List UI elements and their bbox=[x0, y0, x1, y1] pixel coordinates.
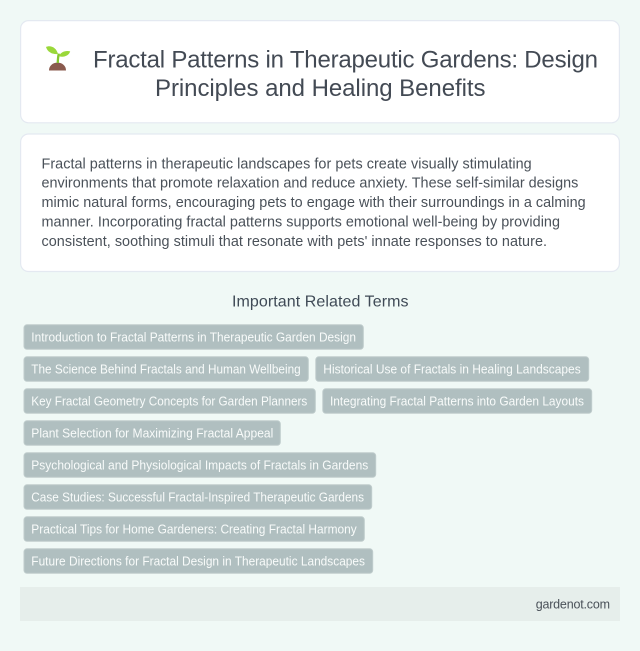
tag: case studies bbox=[24, 485, 372, 509]
text block: description: consistent, soothing stimuli that resonate with pets' innate responses to nature. bbox=[42, 234, 547, 250]
tag: plant selection bbox=[24, 421, 280, 445]
title: Fractal Patterns in Therapeutic Gardens: Design bbox=[93, 46, 598, 73]
footer bbox=[20, 587, 620, 621]
tag: case studies: Case Studies: Successful Fractal-Inspired Therapeutic Gardens bbox=[31, 489, 364, 504]
text block: description: mimic natural forms, encouraging pets to engage with their surroundings in a calming bbox=[42, 195, 586, 211]
tag: science bbox=[24, 357, 308, 381]
title: Principles and Healing Benefits bbox=[155, 75, 486, 102]
tag: plant selection: Plant Selection for Maximizing Fractal Appeal bbox=[31, 425, 273, 440]
tag: integrating patterns bbox=[323, 389, 592, 413]
tag: integrating patterns: Integrating Fractal Patterns into Garden Layouts bbox=[330, 393, 584, 408]
tag: impacts: Psychological and Physiological Impacts of Fractals in Gardens bbox=[31, 457, 369, 472]
panel: title card bbox=[21, 21, 619, 123]
tag: geometry concepts bbox=[24, 389, 315, 413]
icon: seedling bbox=[46, 46, 70, 70]
tag: science: The Science Behind Fractals and Human Wellbeing bbox=[31, 361, 301, 376]
text block: description bbox=[42, 156, 586, 250]
title bbox=[93, 46, 598, 102]
heading: related terms: Important Related Terms bbox=[232, 294, 408, 310]
tag: practical tips bbox=[24, 517, 364, 541]
footer source text: gardenot.com bbox=[536, 597, 610, 611]
tag: practical tips: Practical Tips for Home Gardeners: Creating Fractal Harmony bbox=[31, 521, 357, 536]
tag: introduction: Introduction to Fractal Patterns in Therapeutic Garden Design bbox=[31, 329, 356, 344]
tag: historical use: Historical Use of Fractals in Healing Landscapes bbox=[323, 361, 581, 376]
tag: geometry concepts: Key Fractal Geometry Concepts for Garden Planners bbox=[31, 393, 308, 408]
text block: description: manner. Incorporating fractal patterns supports emotional well-being by providing bbox=[42, 215, 560, 231]
panel: description card bbox=[21, 134, 619, 272]
tag: introduction bbox=[24, 325, 363, 349]
tag: impacts bbox=[24, 453, 376, 477]
tag: historical use bbox=[316, 357, 589, 381]
text block: description: Fractal patterns in therapeutic landscapes for pets create visually stimulating bbox=[42, 156, 532, 172]
tag: future directions: Future Directions for Fractal Design in Therapeutic Landscapes bbox=[31, 553, 365, 568]
text block: description: environments that promote relaxation and reduce anxiety. These self-similar designs bbox=[42, 176, 578, 192]
tag: future directions bbox=[24, 549, 373, 573]
